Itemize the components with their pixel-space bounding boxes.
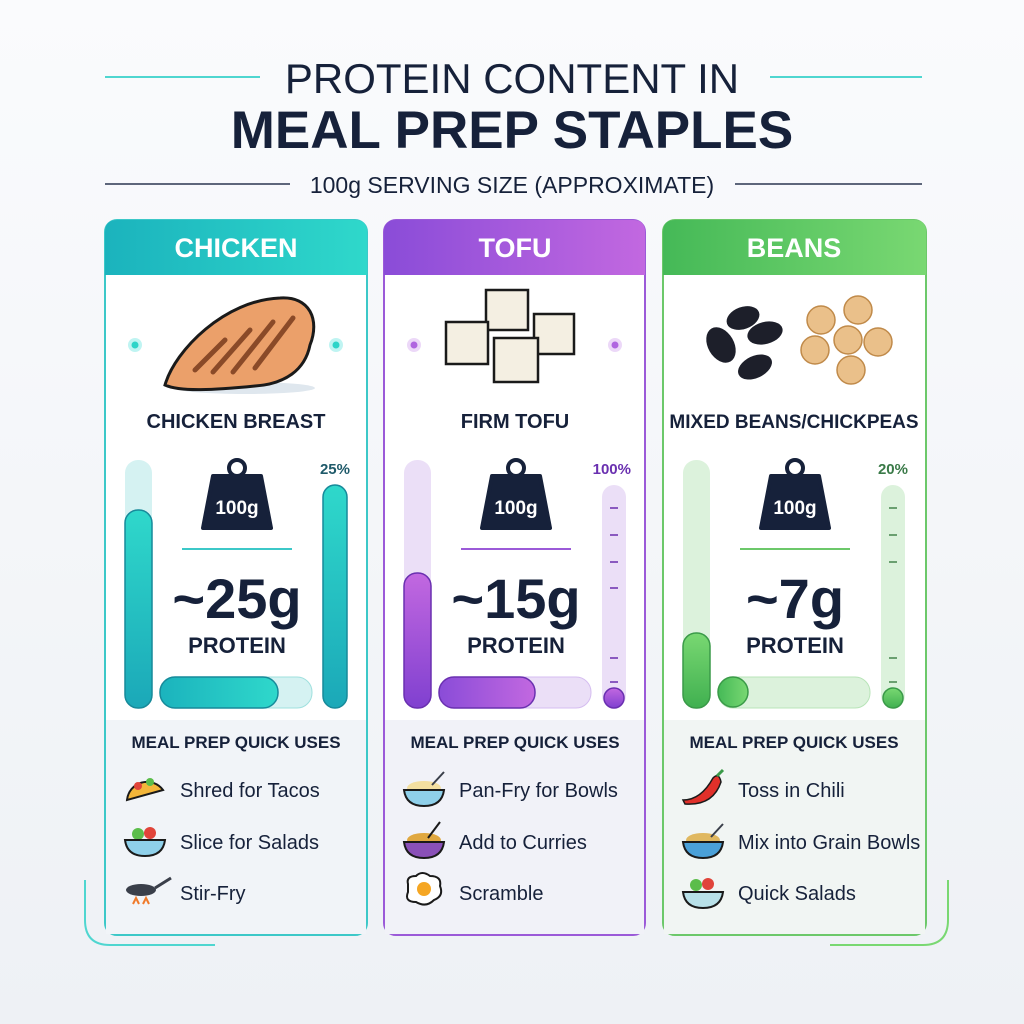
label: chicken breast: CHICKEN BREAST (147, 411, 325, 433)
header: tofu (384, 220, 645, 275)
icon: weight 100g (761, 460, 829, 528)
bar: left vertical (683, 460, 710, 708)
bar: horizontal (160, 677, 312, 708)
bar: right vertical 100% (593, 461, 631, 708)
icon: weight 100g (203, 460, 271, 528)
header: chicken: CHICKEN (174, 233, 298, 263)
panel: beans (663, 220, 926, 935)
uses: beans: Toss in Chili (738, 780, 845, 802)
uses: beans (683, 733, 920, 908)
icon: rice bowl (404, 772, 444, 806)
uses: chicken: Stir-Fry (180, 883, 246, 905)
bar: horizontal (439, 677, 591, 708)
icon: curry bowl (404, 822, 444, 858)
uses: tofu: Add to Curries (459, 832, 587, 854)
panel: chicken (105, 220, 367, 935)
label: firm tofu: FIRM TOFU (461, 411, 569, 433)
header: chicken (105, 220, 367, 275)
bar: right vertical 25%: 25% (320, 461, 350, 478)
icon: pan (126, 878, 171, 904)
stat: 25g (172, 567, 302, 658)
bar: right vertical 20% (878, 461, 908, 708)
uses: chicken (125, 733, 341, 905)
bar: right vertical 100%: 100% (593, 461, 631, 478)
uses: beans: Quick Salads (738, 883, 856, 905)
bar: left vertical (404, 460, 431, 708)
uses: beans: MEAL PREP QUICK USES (689, 733, 899, 752)
icon: chicken breast (128, 298, 343, 394)
bar: left vertical (125, 460, 152, 708)
icon: taco (127, 778, 163, 800)
title (105, 55, 922, 160)
bar: right vertical 20%: 20% (878, 461, 908, 478)
icon: chili (683, 770, 723, 804)
icon: weight 100g: 100g (215, 498, 259, 519)
stat: 7g (746, 567, 844, 658)
stat: 25g: PROTEIN (188, 633, 286, 658)
uses: tofu: Scramble (459, 883, 543, 905)
icon: salad (125, 827, 165, 856)
bar: right vertical 25% (320, 461, 350, 708)
uses: tofu: MEAL PREP QUICK USES (410, 733, 620, 752)
uses: beans: Mix into Grain Bowls (738, 832, 920, 854)
uses: chicken: MEAL PREP QUICK USES (131, 733, 341, 752)
uses: tofu: Pan-Fry for Bowls (459, 780, 618, 802)
icon: salad (683, 878, 723, 908)
uses: chicken: Slice for Salads (180, 832, 319, 854)
header: tofu: TOFU (478, 233, 552, 263)
decorative corners (85, 880, 215, 945)
icon: weight 100g: 100g (773, 498, 817, 519)
header: beans: BEANS (747, 233, 841, 263)
bar: horizontal (718, 677, 870, 708)
icon: tofu cubes (407, 290, 622, 382)
title: MEAL PREP STAPLES (231, 101, 793, 160)
icon: weight 100g (482, 460, 550, 528)
uses: chicken: Shred for Tacos (180, 780, 320, 802)
panel: tofu (384, 220, 645, 935)
icon: grain bowl (683, 824, 723, 858)
icon: weight 100g: 100g (494, 498, 538, 519)
stat: 15g: ~15g (451, 567, 581, 630)
title: PROTEIN CONTENT IN (285, 55, 739, 102)
label: mixed beans/chickpeas: MIXED BEANS/CHICKPEAS (669, 412, 919, 433)
stat: 15g: PROTEIN (467, 633, 565, 658)
stat: 7g: ~7g (746, 567, 844, 630)
stat: 7g: PROTEIN (746, 633, 844, 658)
stat: 25g: ~25g (172, 567, 302, 630)
subtitle: 100g SERVING SIZE (APPROXIMATE) (310, 172, 714, 198)
uses: tofu (404, 733, 620, 905)
icon: beans and chickpeas (700, 296, 892, 385)
icon: egg (407, 873, 441, 905)
header: beans (663, 220, 926, 275)
stat: 15g (451, 567, 581, 658)
